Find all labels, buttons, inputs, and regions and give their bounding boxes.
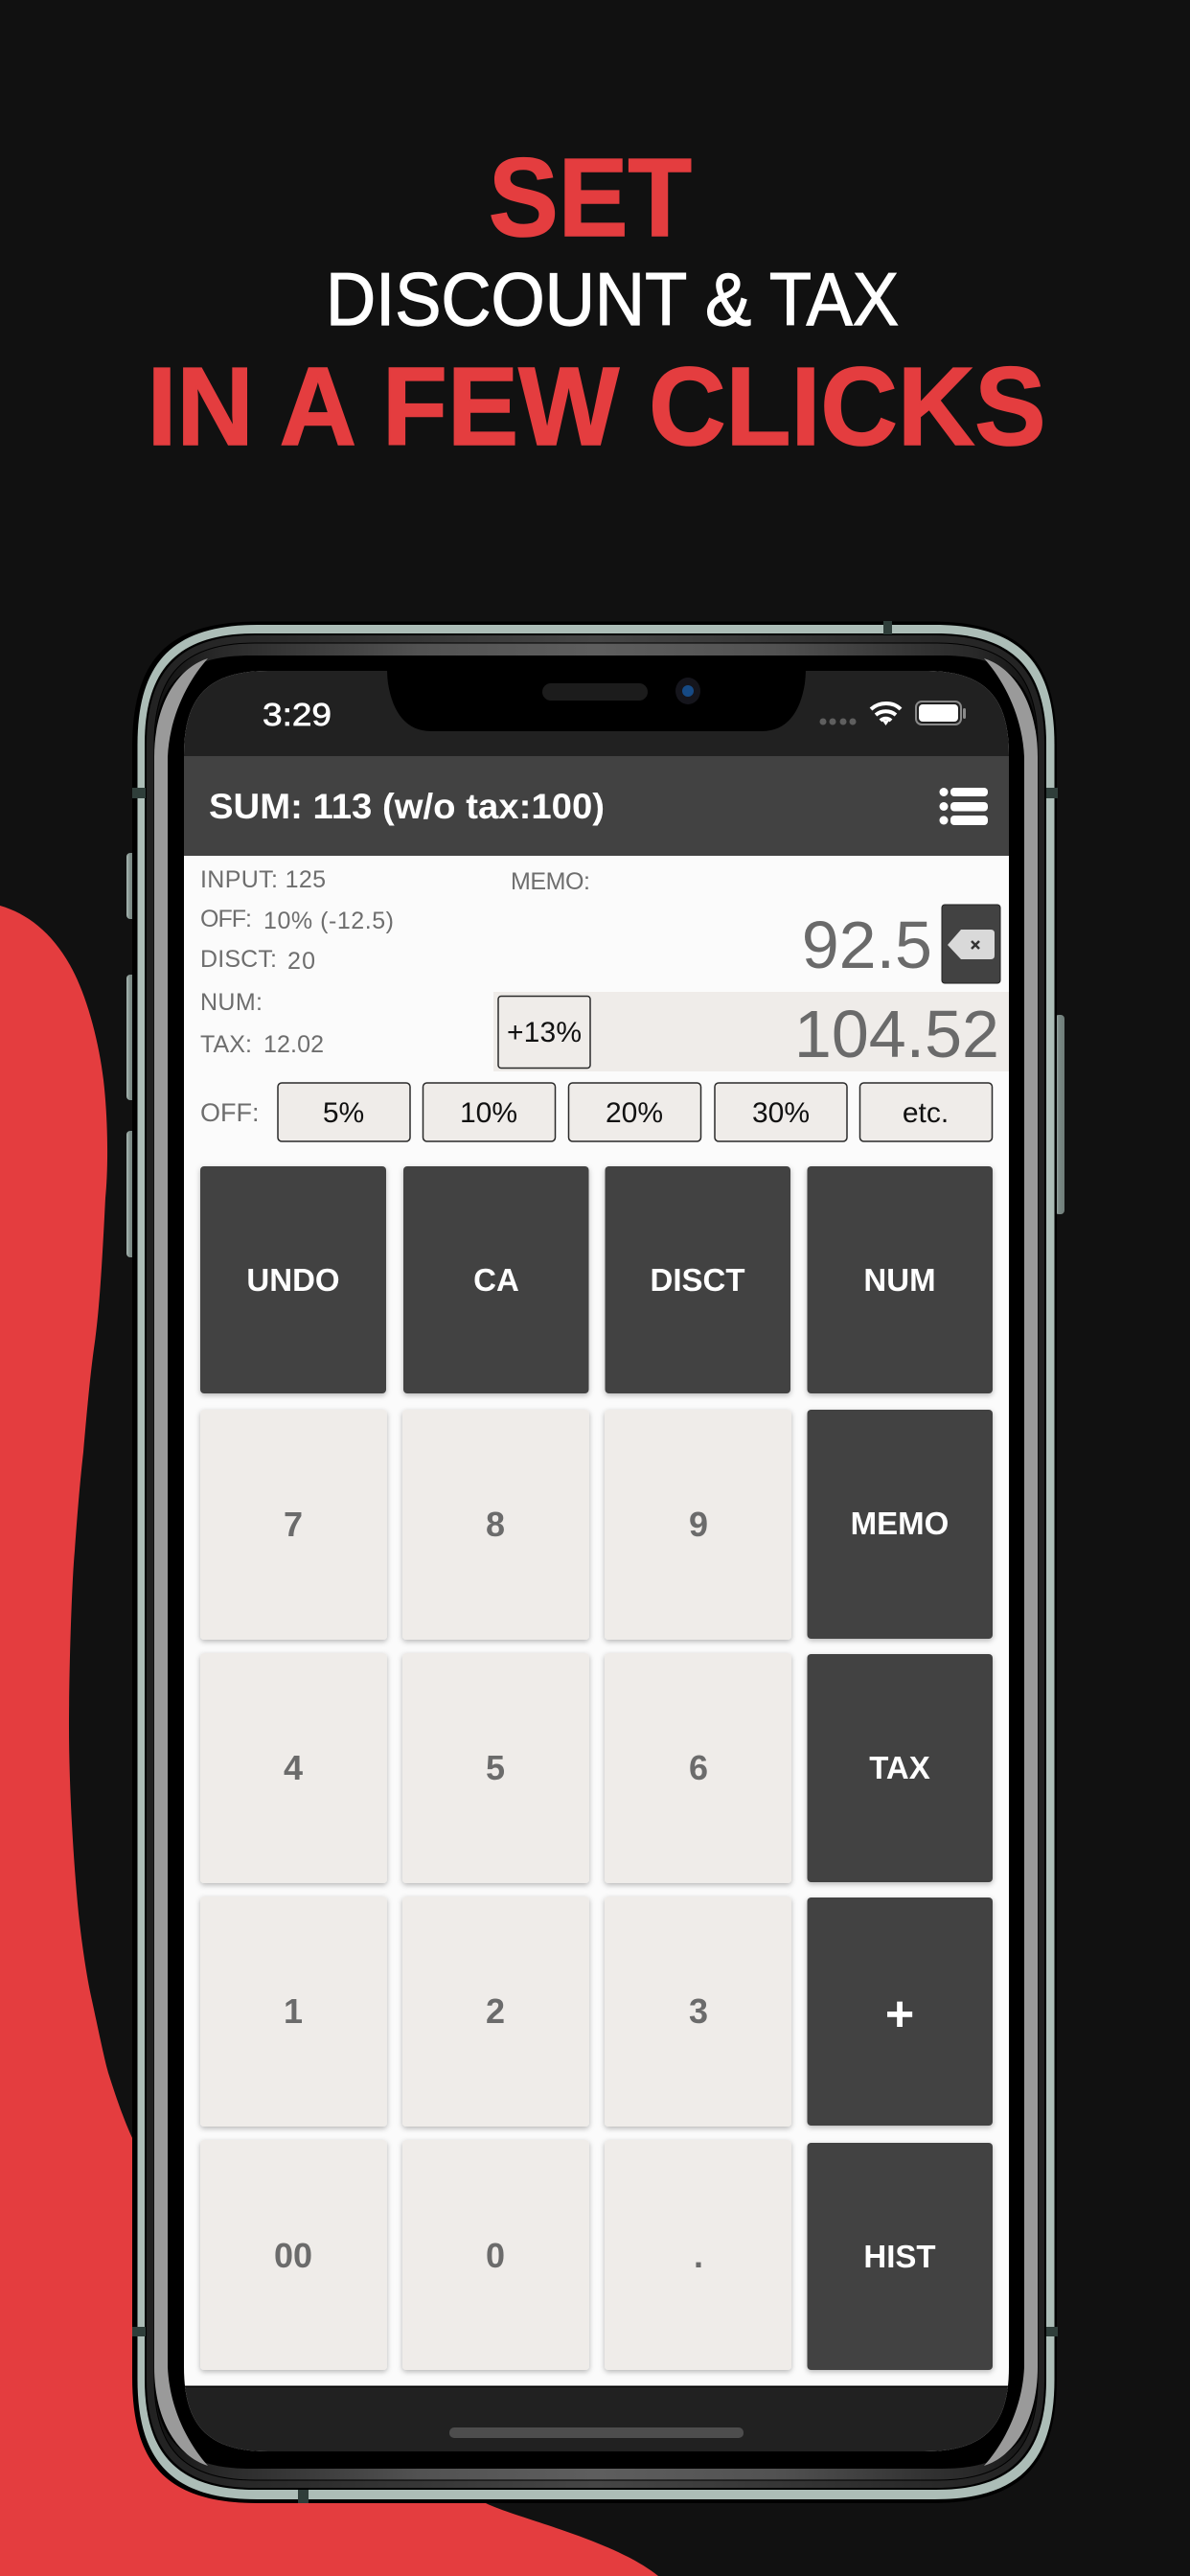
tax key xyxy=(807,1654,993,1882)
key 3 xyxy=(605,1897,791,2127)
tax band xyxy=(493,992,1009,1071)
key 6: 6 xyxy=(689,1748,708,1787)
num line: NUM: xyxy=(200,989,263,1016)
key 2 xyxy=(402,1897,589,2127)
header bar xyxy=(184,756,1009,856)
plus key xyxy=(807,1898,993,2126)
icon: battery xyxy=(916,702,966,724)
title line: IN A FEW CLICKS: IN A FEW CLICKS xyxy=(148,344,1046,469)
etc button xyxy=(860,1083,993,1141)
key 3: 3 xyxy=(689,1991,708,2031)
ca key xyxy=(403,1166,588,1393)
20% button xyxy=(569,1083,701,1141)
5% button xyxy=(278,1083,410,1141)
notch xyxy=(192,661,806,731)
title line: DISCOUNT & TAX: DISCOUNT & TAX xyxy=(326,257,899,341)
hist key: HIST xyxy=(863,2239,936,2274)
off line: OFF: xyxy=(200,906,252,932)
key 5 xyxy=(402,1653,589,1883)
icon: wifi xyxy=(871,703,901,725)
memo label: MEMO: xyxy=(511,868,590,895)
etc button: etc. xyxy=(903,1097,949,1129)
key 1: 1 xyxy=(284,1991,303,2031)
time: 3:29 xyxy=(263,697,332,732)
undo key xyxy=(200,1166,386,1393)
key 4 xyxy=(200,1653,387,1883)
5% button: 5% xyxy=(323,1097,364,1129)
home indicator area xyxy=(184,2386,1009,2451)
num key: NUM xyxy=(863,1262,936,1298)
memo key xyxy=(807,1410,993,1639)
off line: 10% (-12.5) xyxy=(263,908,394,934)
backspace button xyxy=(942,905,1000,983)
key 7: 7 xyxy=(284,1505,303,1544)
phone xyxy=(126,621,1064,2503)
discount line: DISCT: xyxy=(200,946,277,973)
10% button: 10% xyxy=(460,1097,517,1129)
key 7 xyxy=(200,1410,387,1640)
phone frame xyxy=(132,621,1058,2503)
key 8: 8 xyxy=(486,1505,505,1544)
key dot: . xyxy=(694,2236,703,2275)
key 00 xyxy=(200,2140,387,2370)
keypad xyxy=(200,1166,993,2370)
side buttons xyxy=(126,853,1064,1257)
speaker xyxy=(542,683,648,701)
disct key: DISCT xyxy=(650,1262,745,1298)
key 4: 4 xyxy=(284,1748,303,1787)
off label: OFF: xyxy=(200,1098,259,1127)
total value: 104.52 xyxy=(794,997,999,1071)
off buttons row xyxy=(200,1083,993,1141)
signal dots xyxy=(820,719,857,724)
info panel xyxy=(200,866,590,1058)
status bar xyxy=(184,671,1009,756)
key 2: 2 xyxy=(486,1991,505,2031)
discount line: 20 xyxy=(287,948,315,975)
10% button xyxy=(423,1083,556,1141)
status icons and time xyxy=(263,697,966,732)
hist key xyxy=(807,2143,993,2370)
subtotal value: 92.5 xyxy=(802,908,932,982)
key 0: 0 xyxy=(486,2236,505,2275)
30% button xyxy=(715,1083,847,1141)
icon: list menu xyxy=(939,788,988,825)
tax line xyxy=(201,1035,323,1052)
20% button: 20% xyxy=(606,1097,663,1129)
header sum text: SUM: 113 (w/o tax:100) xyxy=(209,787,605,826)
off line xyxy=(201,909,393,933)
tax rate button: +13% xyxy=(507,1017,582,1048)
30% button: 30% xyxy=(752,1097,810,1129)
tax rate button xyxy=(498,997,590,1068)
title line: SET: SET xyxy=(489,135,692,260)
tax line: 12.02 xyxy=(263,1031,324,1058)
plus key: + xyxy=(885,1987,914,2042)
discount line xyxy=(202,950,314,969)
key 0 xyxy=(402,2140,589,2370)
key 9 xyxy=(605,1410,791,1640)
camera xyxy=(675,678,700,704)
key 00: 00 xyxy=(274,2236,312,2275)
num key xyxy=(807,1166,993,1393)
disct key xyxy=(606,1166,790,1393)
input line: INPUT: 125 xyxy=(200,866,326,893)
memo key: MEMO xyxy=(851,1506,949,1541)
red blob shape xyxy=(0,906,658,2576)
key 5: 5 xyxy=(486,1748,505,1787)
key 9: 9 xyxy=(689,1505,708,1544)
key 1 xyxy=(200,1897,387,2127)
ca key: CA xyxy=(473,1262,519,1298)
tax key: TAX xyxy=(869,1750,930,1785)
title xyxy=(148,135,1046,469)
key 8 xyxy=(402,1410,589,1640)
undo key: UNDO xyxy=(246,1262,340,1298)
tax line: TAX: xyxy=(200,1031,252,1058)
key dot xyxy=(605,2140,791,2370)
screen xyxy=(184,671,1009,2451)
key 6 xyxy=(605,1653,791,1883)
